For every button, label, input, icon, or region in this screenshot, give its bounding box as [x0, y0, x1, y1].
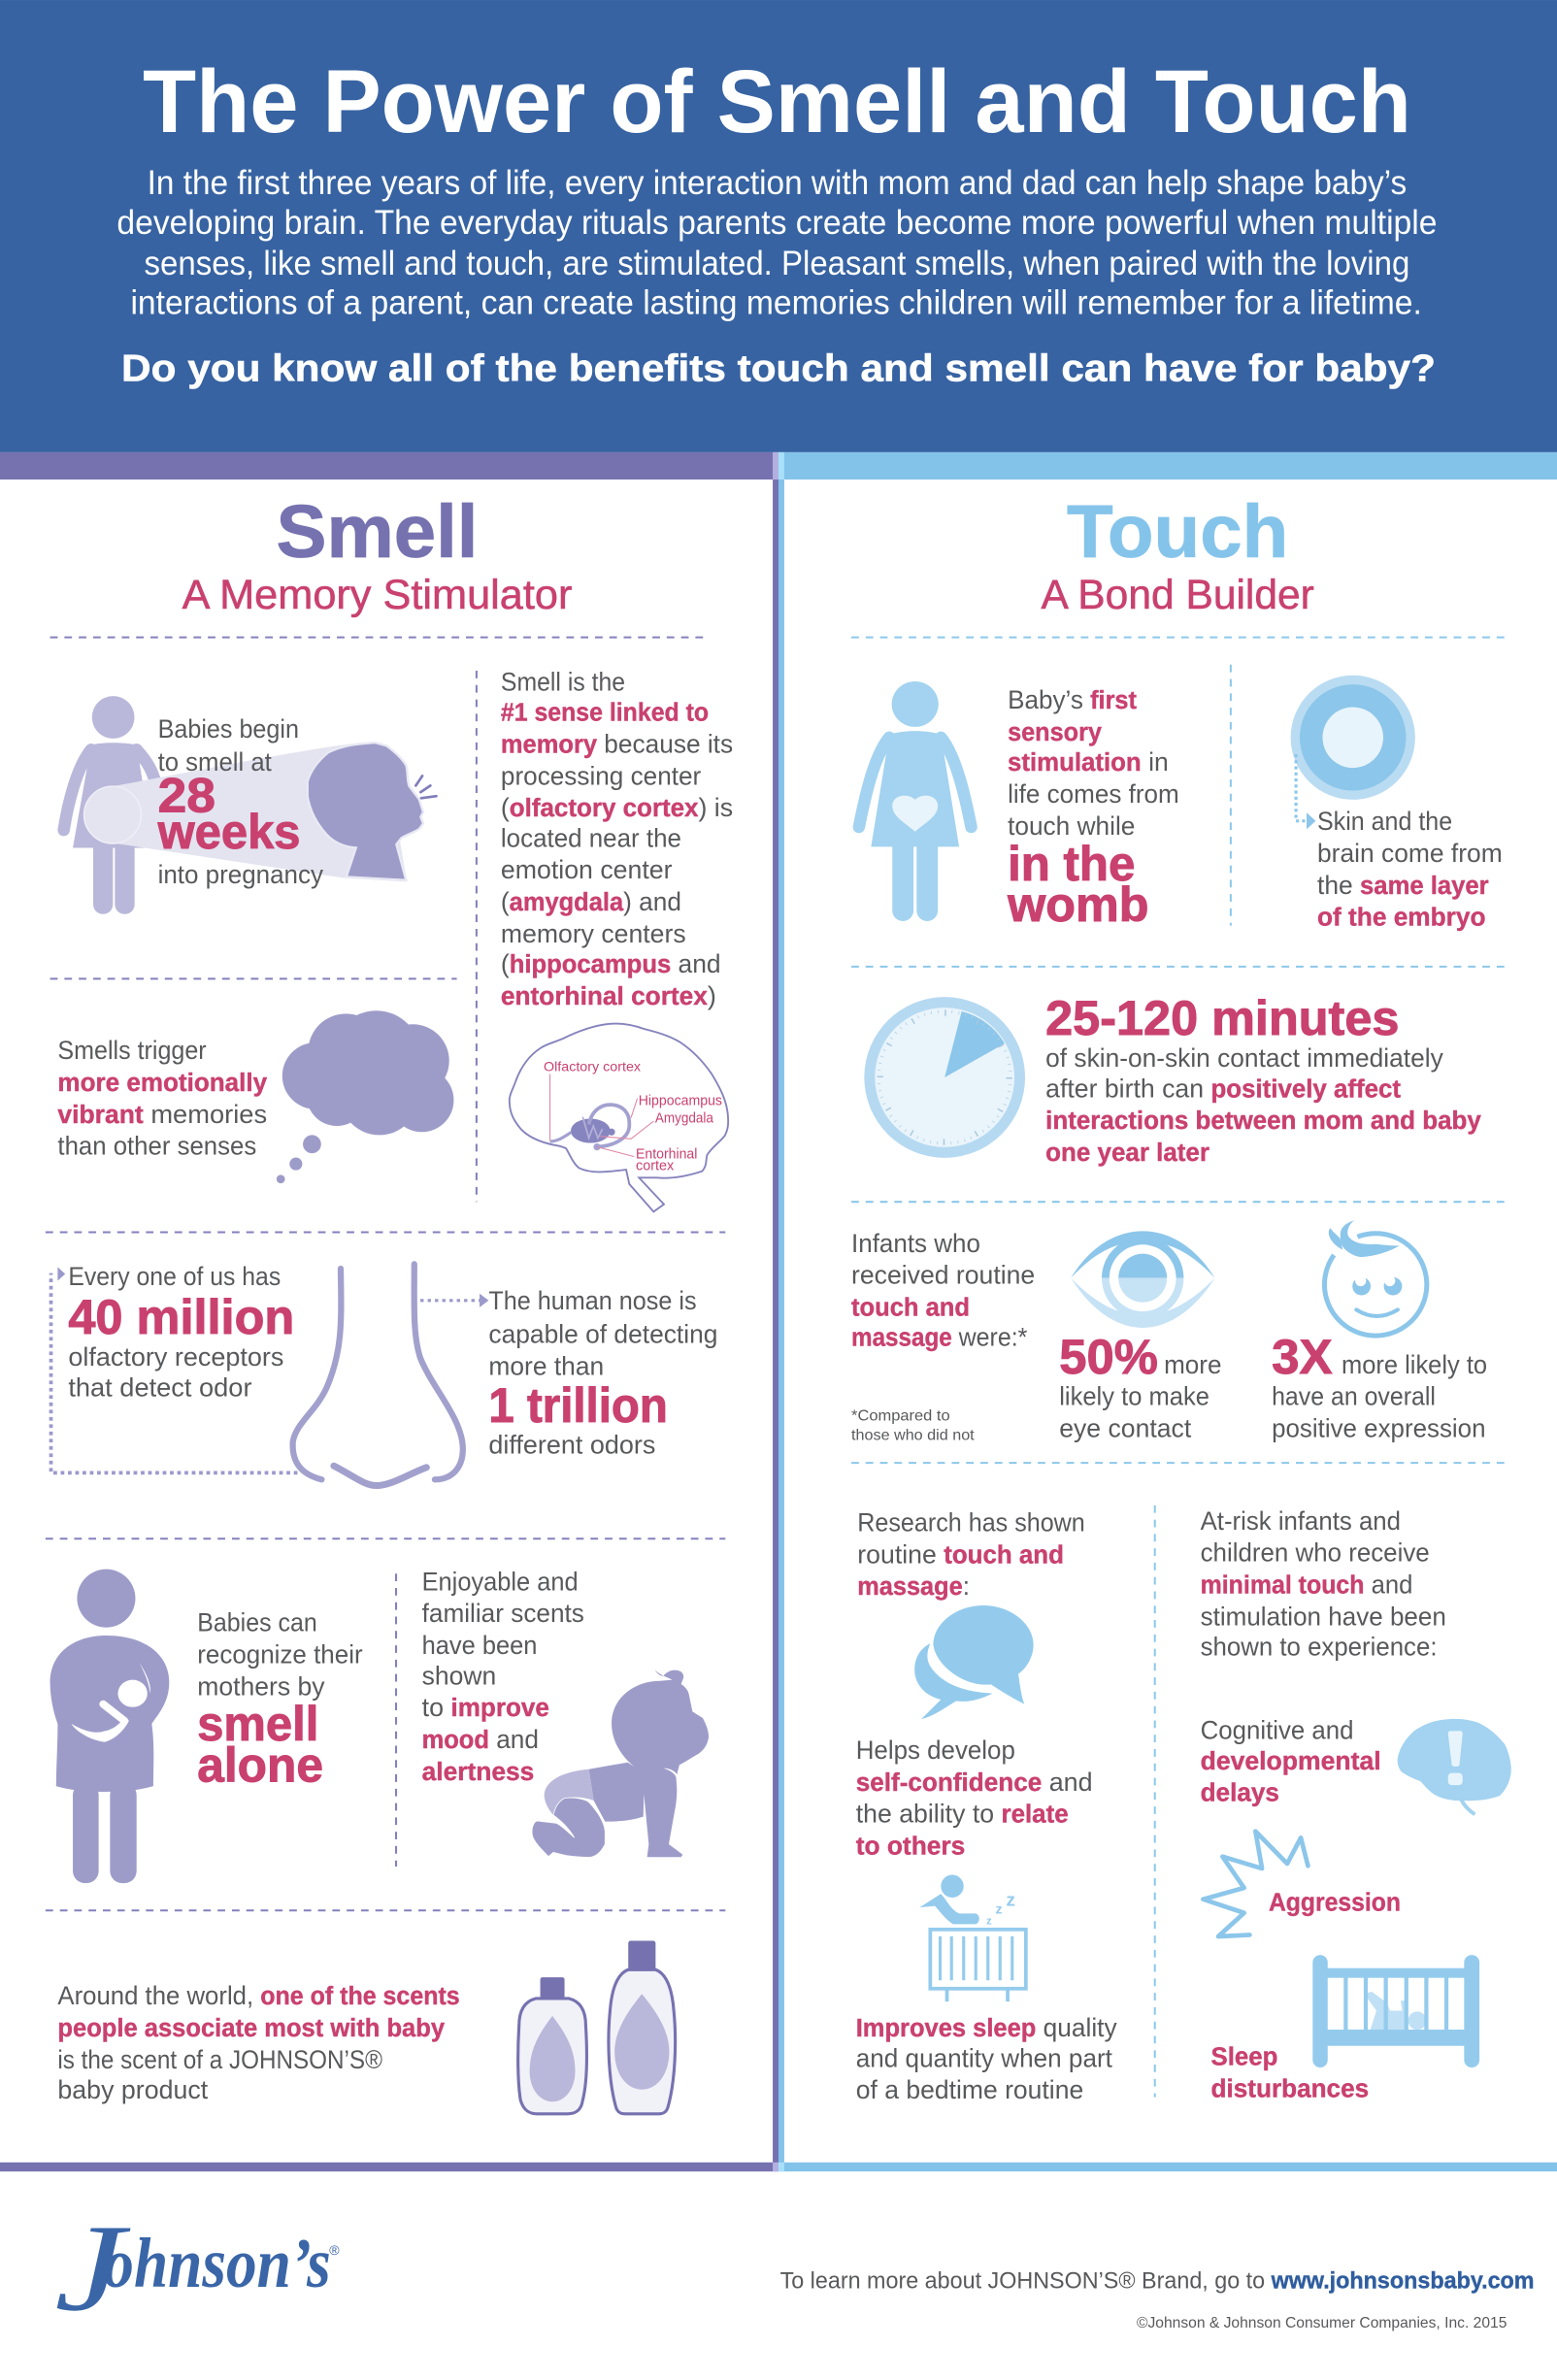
- icon: smiling baby face: [1324, 1220, 1427, 1336]
- text: at-risk infants minimal touch: [1201, 1506, 1446, 1662]
- text: research touch and massage: [857, 1507, 1085, 1601]
- icon: labelled brain diagram: [510, 1024, 728, 1211]
- text: scent of a Johnson's baby product: [57, 1981, 460, 2104]
- divider purple: [773, 452, 778, 2171]
- text: at-risk infants minimal touch: minimal touch and: [1201, 1570, 1412, 1600]
- text: at-risk infants minimal touch: shown to experience:: [1201, 1633, 1437, 1662]
- text: improve mood and alertness: have been: [422, 1631, 537, 1660]
- text: 25-120 minutes skin to skin: 25-120 minutes: [1045, 991, 1399, 1045]
- text: 25-120 minutes skin to skin: interactions between mom and baby: [1045, 1107, 1481, 1135]
- footnote: [851, 1407, 975, 1444]
- text: 3X positive expression: have an overall: [1272, 1382, 1436, 1411]
- text: number one sense linked to memory: memory because its: [501, 729, 733, 758]
- arrow: nose dotted connector: [420, 1294, 488, 1307]
- icon: crib with baby: [1312, 1955, 1479, 2067]
- icon: pregnant mother with heart: [859, 681, 972, 921]
- text: scent of a Johnson's baby product: is the scent of a JOHNSON’S®: [57, 2045, 382, 2074]
- text: smell alone: mothers by: [197, 1671, 325, 1701]
- text: skin and brain same layer: Skin and the: [1317, 807, 1452, 836]
- text: first sensory stimulation in the womb: womb: [1007, 877, 1148, 932]
- text: first sensory stimulation in the womb: sensory: [1008, 719, 1103, 746]
- text: 1 trillion odors: [488, 1286, 717, 1460]
- text: smell alone: alone: [197, 1737, 323, 1792]
- text: scent of a Johnson's baby product: Around the world, one of the scents: [57, 1981, 460, 2010]
- text: developmental delays: delays: [1201, 1780, 1279, 1807]
- footnote: *Compared to: [851, 1407, 950, 1424]
- text: 3X positive expression: [1272, 1330, 1487, 1443]
- text: improve mood and alertness: Enjoyable and: [422, 1567, 579, 1596]
- icon: thought cloud: [277, 1010, 453, 1183]
- icon: baby sleeping in crib: z: [986, 1915, 992, 1927]
- text: emotionally vibrant memories: [57, 1036, 268, 1161]
- text: scent of a Johnson's baby product: people associate most with baby: [57, 2015, 446, 2042]
- text: babies begin to smell at 28 weeks: into pregnancy: [158, 860, 324, 889]
- text: self-confidence: to others: [856, 1833, 965, 1860]
- intro paragraph: In the first three years of life, every interaction with mom and dad can help shape baby’s: [148, 164, 1407, 202]
- text: 1 trillion odors: capable of detecting: [488, 1320, 717, 1349]
- text: 50 percent eye contact: eye contact: [1059, 1414, 1192, 1443]
- text: self-confidence: Helps develop: [856, 1735, 1015, 1765]
- text: emotionally vibrant memories: more emotionally: [57, 1070, 268, 1097]
- text: number one sense linked to memory: (amygdala) and: [501, 887, 681, 916]
- icon: clock: [864, 997, 1025, 1158]
- text: at-risk infants minimal touch: children who receive: [1201, 1538, 1430, 1568]
- text: infants touch and massage: received routine: [851, 1261, 1035, 1290]
- icon: baby sleeping in crib: z: [996, 1901, 1003, 1916]
- text: 1 trillion odors: different odors: [488, 1431, 655, 1460]
- text: babies begin to smell at 28 weeks: 28: [158, 768, 215, 822]
- text: 50 percent eye contact: likely to make: [1059, 1382, 1209, 1411]
- icon: embryo layer circles: [1291, 676, 1415, 800]
- footnote: those who did not: [851, 1428, 975, 1444]
- icon: brain with exclamation: [1398, 1719, 1511, 1814]
- smell subheading: A Memory Stimulator: [182, 572, 572, 617]
- text: 40 million receptors: Every one of us has: [68, 1262, 281, 1291]
- intro paragraph: interactions of a parent, can create lasting memories children will remember for a lifetime.: [130, 284, 1422, 322]
- footer call to action: To learn more about JOHNSON’S® Brand, go to www.johnsonsbaby.com: [780, 2268, 1535, 2295]
- text: 50 percent eye contact: 50%: [1059, 1330, 1158, 1384]
- text: smell alone: recognize their: [197, 1639, 363, 1669]
- text: emotionally vibrant memories: vibrant memories: [57, 1100, 267, 1129]
- text: emotionally vibrant memories: than other senses: [57, 1132, 256, 1161]
- text: 40 million receptors: olfactory receptors: [68, 1342, 283, 1372]
- text: 1 trillion odors: more than: [488, 1351, 604, 1380]
- panel: touch: [773, 452, 1557, 2171]
- text: 3X positive expression: positive expression: [1272, 1414, 1486, 1443]
- text: improve mood and alertness: to improve: [422, 1693, 549, 1722]
- text: 25-120 minutes skin to skin: after birth can positively affect: [1045, 1074, 1401, 1103]
- text: first sensory stimulation in the womb: [1007, 685, 1179, 932]
- text: first sensory stimulation in the womb: Baby’s first: [1008, 685, 1137, 714]
- icon: speech bubbles: [914, 1605, 1034, 1719]
- text: at-risk infants minimal touch: At-risk infants and: [1201, 1506, 1401, 1536]
- text: skin and brain same layer: brain come from: [1317, 839, 1503, 868]
- bottom band smell: [0, 2163, 773, 2171]
- text: sleep disturbances: disturbances: [1211, 2076, 1369, 2103]
- icon: eye: [1071, 1231, 1215, 1328]
- logo: Johnson's: [54, 2198, 340, 2336]
- text: 25-120 minutes skin to skin: of skin-on-skin contact immediately: [1045, 1043, 1443, 1073]
- icon: aggression zigzag burst: [1203, 1832, 1308, 1936]
- icon: labelled brain diagram: Entorhinal: [636, 1146, 697, 1162]
- logo: Johnson's: ®: [329, 2242, 340, 2258]
- text: 25-120 minutes skin to skin: one year later: [1045, 1140, 1209, 1167]
- text: smell alone: Babies can: [197, 1608, 317, 1637]
- text: number one sense linked to memory: #1 sense linked to: [501, 700, 709, 727]
- text: 40 million receptors: 40 million: [68, 1290, 294, 1344]
- smell heading: Smell: [277, 491, 478, 574]
- text: number one sense linked to memory: (hippocampus and: [501, 949, 721, 978]
- text: babies begin to smell at 28 weeks: to smell at: [158, 747, 272, 777]
- subheading question: Do you know all of the benefits touch and smell can have for baby?: [121, 347, 1436, 389]
- text: 50 percent eye contact: more: [1164, 1350, 1221, 1379]
- text: improves sleep: and quantity when part: [856, 2043, 1113, 2072]
- text: 25-120 minutes skin to skin: [1045, 991, 1481, 1167]
- text: improve mood and alertness: familiar scents: [422, 1599, 584, 1628]
- text: 3X positive expression: 3X: [1272, 1330, 1333, 1384]
- text: babies begin to smell at 28 weeks: weeks: [157, 805, 301, 859]
- text: first sensory stimulation in the womb: stimulation in: [1008, 747, 1169, 777]
- text: improve mood and alertness: mood and: [422, 1725, 539, 1754]
- icon: baby sleeping in crib: [919, 1875, 1026, 2001]
- text: 3X positive expression: more likely to: [1342, 1350, 1487, 1379]
- text: improves sleep: Improves sleep quality: [856, 2013, 1117, 2042]
- text: developmental delays: Cognitive and: [1201, 1716, 1354, 1745]
- text: improve mood and alertness: shown: [422, 1661, 496, 1690]
- text: 40 million receptors: that detect odor: [68, 1372, 252, 1402]
- bottom band touch: [784, 2163, 1557, 2171]
- icon: baby sleeping in crib: z: [1007, 1890, 1015, 1910]
- text: smell alone: [197, 1608, 363, 1792]
- icon: labelled brain diagram: Hippocampus: [639, 1093, 722, 1108]
- text: improves sleep: [856, 2013, 1117, 2104]
- panel: smell: [0, 452, 778, 2171]
- text: developmental delays: [1201, 1716, 1381, 1807]
- touch heading: Touch: [1067, 491, 1288, 574]
- text: sleep disturbances: [1211, 2044, 1369, 2103]
- text: infants touch and massage: Infants who: [851, 1229, 980, 1258]
- title: The Power of Smell and Touch: [143, 51, 1411, 151]
- logo: Johnson's: J: [54, 2198, 131, 2336]
- text: skin and brain same layer: of the embryo: [1317, 905, 1486, 932]
- text: research touch and massage: massage:: [857, 1571, 970, 1601]
- text: skin and brain same layer: [1317, 807, 1503, 932]
- text: babies begin to smell at 28 weeks: Babies begin: [158, 714, 299, 744]
- text: research touch and massage: routine touch and: [857, 1539, 1064, 1569]
- text: number one sense linked to memory: emotion center: [501, 855, 673, 884]
- footer copyright: ©Johnson & Johnson Consumer Companies, Inc. 2015: [1137, 2315, 1507, 2331]
- text: infants touch and massage: [851, 1229, 1035, 1352]
- icon: nose outline: [293, 1264, 463, 1486]
- text: 1 trillion odors: 1 trillion: [488, 1378, 668, 1433]
- text: self-confidence: [856, 1735, 1093, 1860]
- text: scent of a Johnson's baby product: baby product: [57, 2075, 209, 2104]
- text: first sensory stimulation in the womb: touch while: [1008, 811, 1135, 841]
- icon: mother holding baby: [50, 1570, 169, 1883]
- top band touch: [784, 452, 1557, 479]
- text: at-risk infants minimal touch: stimulation have been: [1201, 1602, 1446, 1631]
- text: babies begin to smell at 28 weeks: [157, 714, 324, 889]
- text: first sensory stimulation in the womb: life comes from: [1008, 779, 1179, 809]
- text: self-confidence: the ability to relate: [856, 1800, 1069, 1829]
- text: aggression: Aggression: [1269, 1889, 1401, 1916]
- text: first sensory stimulation in the womb: in the: [1008, 837, 1135, 891]
- touch subheading: A Bond Builder: [1041, 572, 1314, 617]
- arrow: embryo dotted connector: [1296, 754, 1315, 829]
- text: 50 percent eye contact: [1059, 1330, 1221, 1443]
- text: emotionally vibrant memories: Smells trigger: [57, 1036, 207, 1065]
- top band smell: [0, 452, 773, 479]
- text: research touch and massage: Research has shown: [857, 1507, 1085, 1537]
- text: number one sense linked to memory: memory centers: [501, 919, 686, 948]
- text: number one sense linked to memory: entorhinal cortex): [501, 981, 716, 1010]
- text: 40 million receptors: [68, 1262, 294, 1402]
- intro paragraph: senses, like smell and touch, are stimulated. Pleasant smells, when paired with the loving: [145, 245, 1409, 282]
- text: 1 trillion odors: The human nose is: [488, 1286, 697, 1315]
- icon: labelled brain diagram: cortex: [636, 1159, 675, 1174]
- divider blue: [778, 452, 784, 2171]
- text: number one sense linked to memory: [501, 667, 733, 1010]
- text: number one sense linked to memory: (olfactory cortex) is: [501, 793, 733, 822]
- text: smell alone: smell: [197, 1697, 318, 1751]
- icon: mother with fetus beam to child: [64, 696, 436, 914]
- text: skin and brain same layer: the same layer: [1317, 871, 1489, 900]
- text: infants touch and massage: massage were:*: [851, 1323, 1027, 1352]
- text: number one sense linked to memory: located near the: [501, 823, 681, 852]
- intro paragraph: [116, 164, 1437, 322]
- intro paragraph: developing brain. The everyday rituals parents create become more powerful when multiple: [116, 204, 1437, 242]
- arrow: receptors dotted connector: [51, 1267, 297, 1472]
- text: self-confidence: self-confidence and: [856, 1768, 1093, 1797]
- text: improves sleep: of a bedtime routine: [856, 2075, 1083, 2104]
- text: infants touch and massage: touch and: [851, 1294, 970, 1321]
- text: sleep disturbances: Sleep: [1211, 2044, 1277, 2071]
- text: developmental delays: developmental: [1201, 1748, 1381, 1775]
- text: number one sense linked to memory: Smell is the: [501, 667, 625, 696]
- text: improve mood and alertness: [422, 1567, 584, 1786]
- text: improve mood and alertness: alertness: [422, 1759, 534, 1786]
- icon: labelled brain diagram: Olfactory cortex: [544, 1058, 641, 1074]
- logo: Johnson's: ohnson’s: [103, 2224, 331, 2302]
- text: number one sense linked to memory: processing center: [501, 761, 701, 790]
- icon: baby product bottles: [518, 1941, 676, 2114]
- icon: crawling baby: [532, 1669, 709, 1857]
- panel: header: [0, 0, 1557, 452]
- icon: labelled brain diagram: Amygdala: [655, 1111, 714, 1127]
